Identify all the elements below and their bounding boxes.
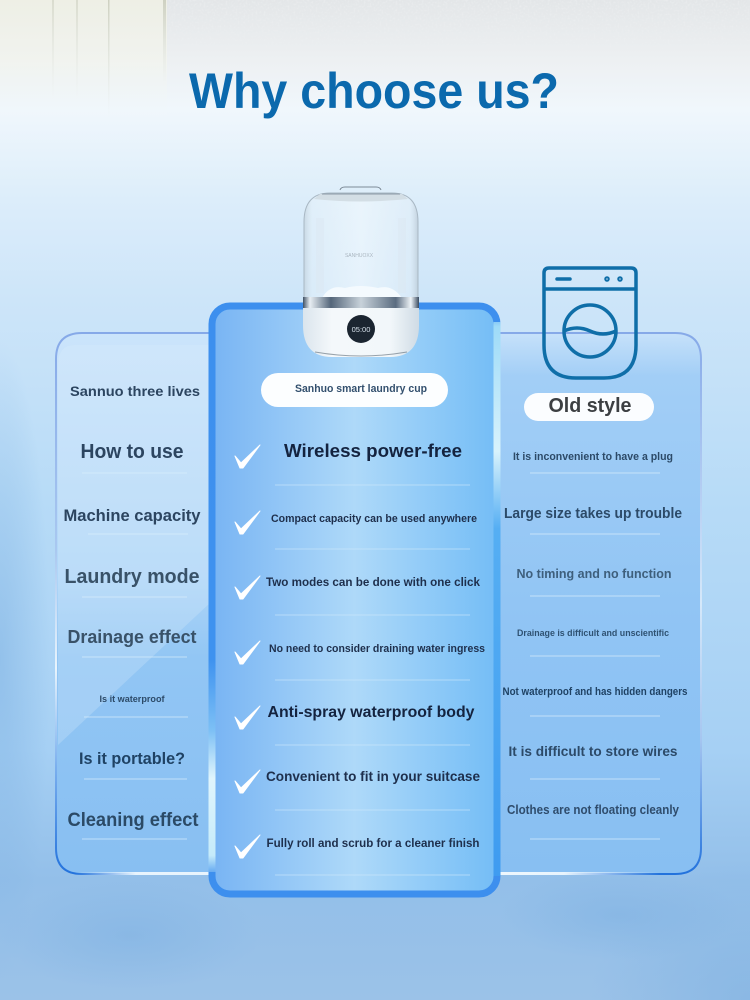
row: Convenient: Convenient to fit in your suitcase (266, 768, 480, 784)
product: laundry cup (303, 187, 419, 357)
label: Laundry mode: Laundry mode (64, 566, 200, 588)
row: Anti-spray (235, 704, 475, 729)
row: No need to consider (235, 641, 485, 664)
text: wires: It is difficult to store wires (508, 743, 678, 759)
pill: Old style: Old style (548, 395, 632, 417)
label: How to use: How to use (80, 441, 184, 463)
text: waterproof: Not waterproof and has hidden dangers (502, 686, 688, 698)
panel: left comparison column (56, 333, 246, 875)
text: floating: Clothes are not floating cleanly (507, 802, 680, 817)
label: Drainage effect: Drainage effect (68, 627, 197, 647)
icon: washing machine (544, 268, 636, 378)
label: Machine capacity: Machine capacity (64, 506, 201, 525)
row: Fully roll: Fully roll and scrub for a cleaner finish (266, 836, 480, 850)
text: timing: No timing and no function (516, 566, 672, 581)
pill: Old style (524, 393, 654, 421)
product: laundry cup: 05:00 (352, 325, 370, 334)
label: Is it portable?: Is it portable? (79, 749, 185, 768)
center panel frame highlights (212, 322, 497, 894)
label: Cleaning effect: Cleaning effect (68, 810, 199, 831)
panel: right comparison column (480, 268, 701, 875)
decorative diagonal sheen (58, 345, 210, 745)
text: drainage: Drainage is difficult and unscientific (517, 628, 669, 639)
label: Sannuo three lives: Sannuo three lives (70, 383, 200, 399)
panel: center highlighted column (212, 306, 497, 894)
row: Wireless power-free (235, 440, 462, 468)
text: size: Large size takes up trouble (504, 505, 682, 522)
row: Convenient (235, 768, 480, 793)
row: Compact capacity (235, 511, 477, 534)
row: Two modes: Two modes can be done with one click (266, 575, 480, 589)
product: laundry cup: SANHUOXX (345, 253, 374, 259)
row: No need to consider: No need to consider draining water ingress (269, 643, 485, 655)
label: Is it waterproof: Is it waterproof (100, 694, 165, 705)
row: Wireless power-free: Wireless power-free (284, 440, 462, 461)
pill: Sanhuo smart laundry cup (261, 373, 448, 407)
row: Fully roll (235, 835, 480, 858)
row: Compact capacity: Compact capacity can be used anywhere (271, 513, 477, 525)
row: Anti-spray: Anti-spray waterproof body (268, 704, 475, 721)
pill: Sanhuo smart laundry cup: Sanhuo smart laundry cup (295, 383, 427, 395)
row: Two modes (235, 575, 480, 599)
title: Why choose us? (189, 63, 559, 119)
text: plug: It is inconvenient to have a plug (513, 451, 673, 463)
